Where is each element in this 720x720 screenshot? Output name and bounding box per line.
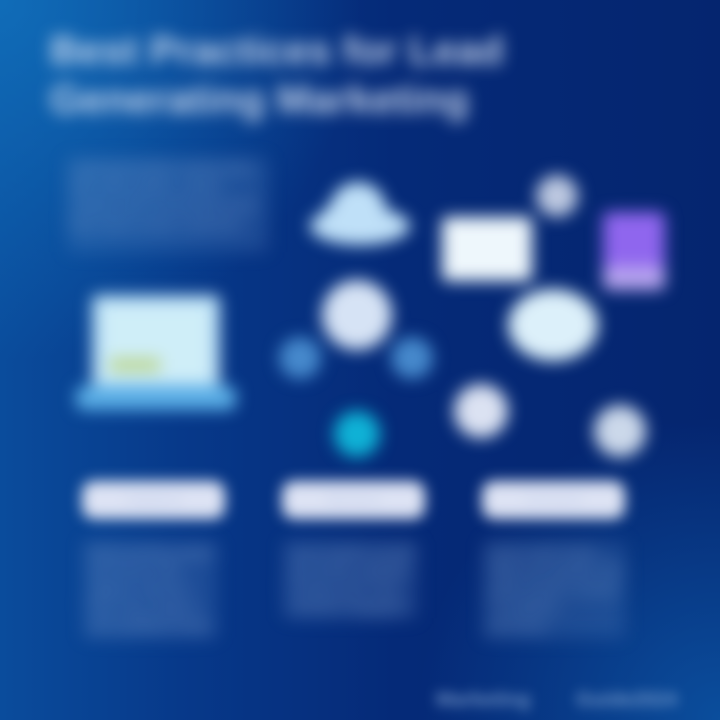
icon: message card	[442, 217, 532, 281]
icon: left node	[279, 337, 321, 379]
title: Best Practices for Lead Generating Marketing	[50, 29, 504, 122]
icon: white node	[454, 384, 508, 438]
icon: cyan node	[334, 411, 380, 457]
icon: far right node	[594, 405, 646, 457]
button: column 3 heading: Convert	[525, 491, 582, 508]
icon: small grey circle	[536, 175, 578, 217]
intro text block: Lead generation works best with clear goals, useful content and connected tools that reach every customer.	[68, 159, 256, 233]
column 3 text: Score each lead, follow up quickly and guide buyers toward a confident purchase.	[485, 543, 623, 636]
button: column 1 heading: Capture	[125, 491, 182, 508]
icon: chat bubble	[508, 289, 598, 361]
button: column 3 heading	[482, 481, 625, 519]
button: column 1 heading	[82, 481, 225, 519]
icon: laptop	[66, 282, 246, 422]
button: column 2 heading: Nurture	[326, 491, 381, 508]
footer: Marketing Guide2024	[436, 689, 677, 711]
icon: right node	[391, 337, 433, 379]
icon: purple phone	[603, 212, 665, 290]
network diagram	[270, 164, 677, 469]
icon: cloud	[310, 182, 410, 245]
button: column 2 heading	[282, 481, 425, 519]
column 1 text: Build landing pages and forms that capture interest from new visitors and qualified leads.	[85, 543, 216, 636]
icon: central hub node	[322, 280, 392, 350]
column 2 text: Send helpful emails and timely updates to keep your new contacts engaged.	[285, 543, 416, 617]
